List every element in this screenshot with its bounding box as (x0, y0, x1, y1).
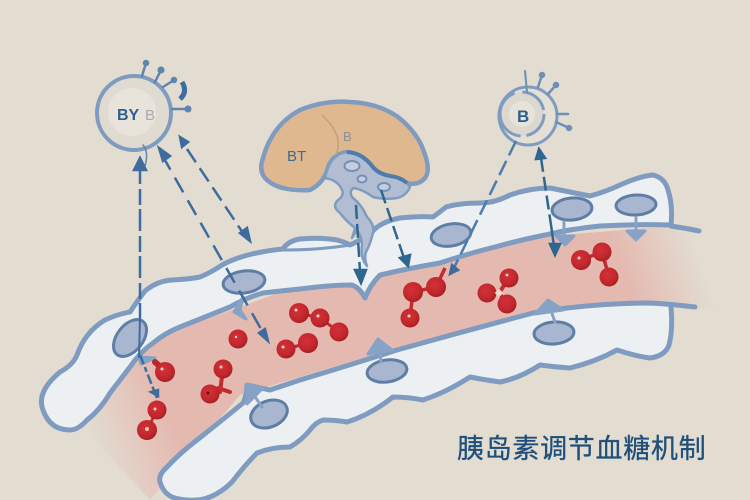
arrow: left cell diagonal two (180, 137, 250, 241)
upper vessel wall tissue (41, 175, 699, 430)
receptor arrowheads on vessel wall (139, 218, 645, 407)
arrow: right cell to vessel (450, 141, 516, 274)
molecule 7 (400, 268, 446, 328)
molecule 9 (571, 242, 618, 286)
glucose molecules (137, 242, 618, 440)
title: 胰岛素调节血糖机制 (457, 434, 706, 464)
molecule 1 (155, 362, 175, 382)
pancreas organ (261, 102, 428, 266)
molecule 3 (228, 330, 248, 348)
molecule 8 (478, 268, 518, 314)
beta cell left (97, 61, 190, 166)
arrow: duct to vessel left (355, 205, 366, 283)
arrow: left cell vertical (134, 158, 158, 398)
molecule 2 (137, 400, 166, 440)
arrow: left cell diagonal one (159, 148, 268, 341)
molecule 4 (200, 360, 232, 404)
beta cell right (499, 71, 571, 145)
receptor spikes (525, 71, 571, 130)
arrow: right cell to vessel second (536, 149, 560, 255)
duct vesicles (344, 161, 390, 191)
signal arrows (134, 137, 560, 398)
pancreas label right: B (343, 129, 352, 144)
arrow: duct to vessel right (381, 190, 410, 266)
lower vessel wall tissue (160, 303, 695, 500)
receptor spikes (142, 61, 190, 166)
cell label: BY (117, 107, 140, 124)
cell label faded: B (145, 107, 155, 124)
blood vessel lumen (80, 226, 715, 500)
curved mark (180, 82, 185, 99)
pancreas duct (325, 152, 410, 266)
molecule 6 (276, 333, 318, 358)
cell label: B (517, 107, 529, 126)
receptors on vessel wall (107, 194, 656, 433)
molecule 5 (289, 303, 348, 342)
pancreas label left: BT (287, 148, 306, 165)
